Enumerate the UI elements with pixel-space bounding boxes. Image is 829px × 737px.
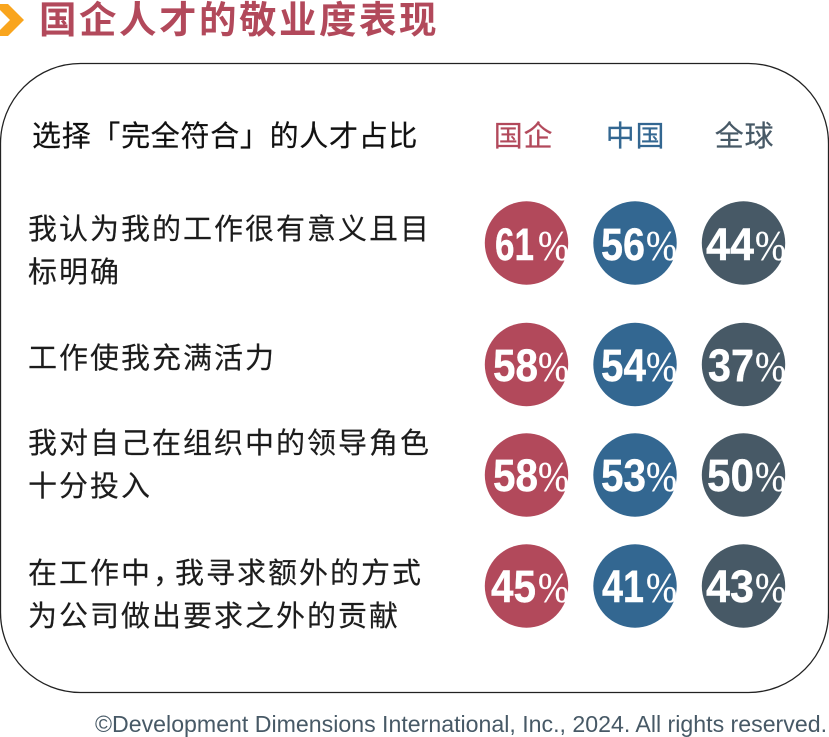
- row 2 circle 中国 54%: [593, 323, 677, 406]
- row 2 label: 工作使我充满活力: [28, 342, 276, 375]
- row 1 circle 国企 61%: 61: [495, 219, 534, 270]
- copyright footer: ©Development Dimensions International, Inc., 2024. All rights reserved.: [95, 711, 827, 737]
- row 3 circle 全球 50%: 50: [707, 450, 754, 501]
- row 4 circle 全球 43%: %: [755, 566, 786, 612]
- row 3 circle 国企 58%: 58: [493, 450, 538, 501]
- row 4 circle 国企 45%: %: [538, 566, 569, 612]
- row 4 label: 我寻求额外的方式: [175, 557, 423, 590]
- row 1 label: 标明确: [28, 256, 121, 289]
- column header: 国企: 国企: [494, 120, 553, 153]
- row 3 circle 国企 58%: %: [538, 455, 569, 501]
- row 2 circle 全球 37%: %: [755, 345, 786, 391]
- row 1 circle 全球 44%: 44: [706, 219, 754, 270]
- row 1 circle 国企 61%: %: [538, 224, 569, 270]
- title: 国企人才的敬业度表现: [39, 0, 439, 41]
- row 2 circle 国企 58%: [485, 323, 569, 406]
- row 1 circle 中国 56%: 56: [601, 219, 645, 270]
- row 2 circle 全球 37%: 37: [708, 340, 754, 391]
- row 3 label: 我对自己在组织中的领导角色: [28, 427, 431, 460]
- row 2 circle 中国 54%: 54: [601, 340, 646, 391]
- row 4 circle 国企 45%: 45: [491, 561, 536, 612]
- table heading: 选择「完全符合」的人才占比: [32, 120, 418, 153]
- row 4 label: ，: [153, 558, 184, 590]
- row 1 circle 全球 44%: [702, 201, 786, 285]
- row 2 circle 全球 37%: [702, 323, 786, 406]
- row 4 label: 为公司做出要求之外的贡献: [28, 600, 400, 633]
- column header: 全球: 全球: [715, 120, 774, 153]
- row 3 circle 中国 53%: %: [646, 455, 677, 501]
- row 2 circle 国企 58%: 58: [493, 340, 538, 391]
- row 3 circle 全球 50%: [702, 433, 786, 517]
- row 4 circle 中国 41%: %: [646, 566, 677, 612]
- row 3 circle 国企 58%: [485, 433, 569, 517]
- row 2 circle 国企 58%: %: [538, 345, 569, 391]
- row 1 circle 中国 56%: [593, 201, 677, 285]
- row 3 circle 全球 50%: %: [755, 455, 786, 501]
- row 4 circle 全球 43%: [702, 544, 786, 628]
- row 1 label: 我认为我的工作很有意义且目: [28, 213, 431, 246]
- row 1 circle 中国 56%: %: [646, 224, 677, 270]
- row 3 circle 中国 53%: 53: [601, 450, 646, 501]
- row 1 circle 国企 61%: [485, 201, 569, 285]
- icon: orange chevron: [0, 4, 24, 36]
- row 2 circle 中国 54%: %: [646, 345, 677, 391]
- row 3 label: 十分投入: [28, 470, 152, 503]
- row 3 circle 中国 53%: [593, 433, 677, 517]
- column header: 中国: 中国: [606, 120, 665, 153]
- row 4 circle 中国 41%: [593, 544, 677, 628]
- row 4 circle 国企 45%: [485, 544, 569, 628]
- row 4 circle 全球 43%: 43: [706, 561, 754, 612]
- row 4 label: 在工作中: [28, 557, 152, 590]
- row 1 circle 全球 44%: %: [755, 224, 786, 270]
- row 4 circle 中国 41%: 41: [602, 561, 644, 612]
